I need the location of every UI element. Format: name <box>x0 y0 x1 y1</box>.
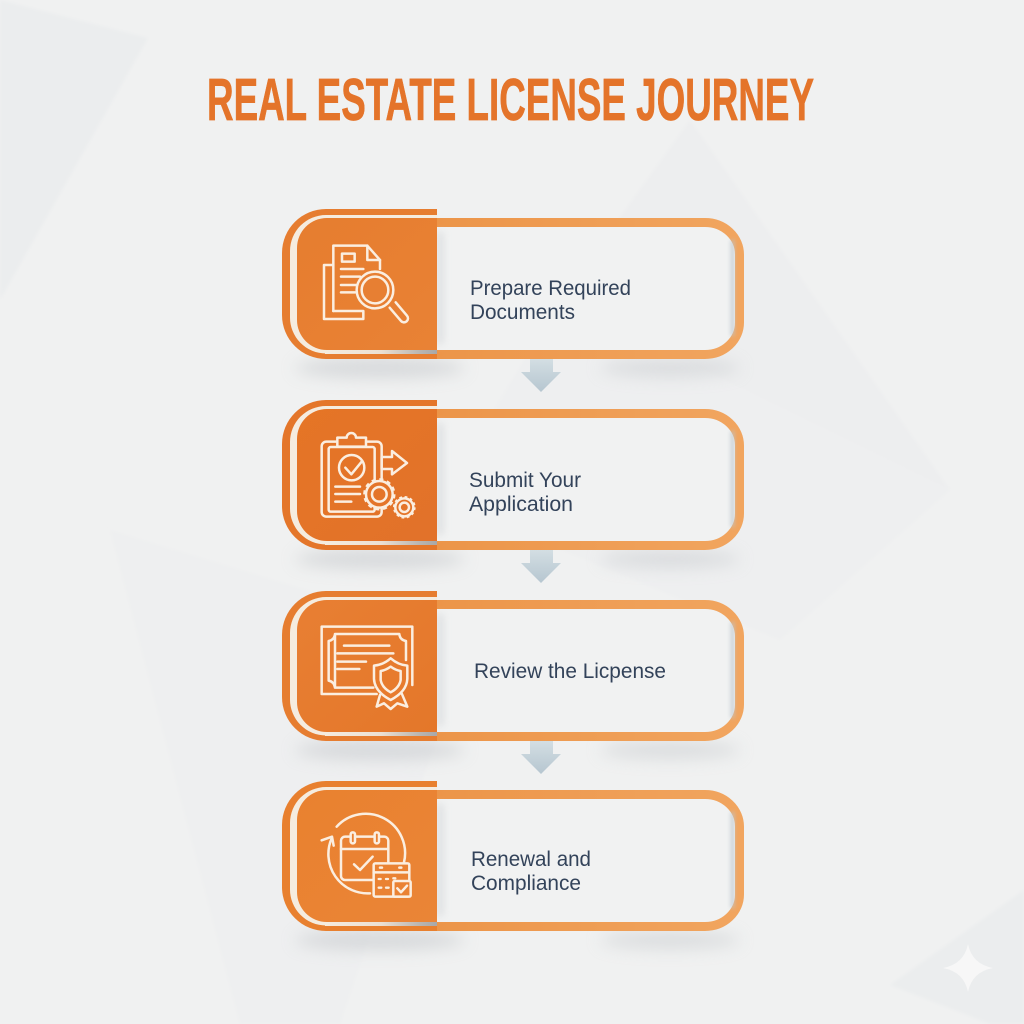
step 2 orange panel <box>297 409 437 541</box>
step 3 orange panel <box>297 600 437 732</box>
step 4 label: Compliance <box>471 872 581 895</box>
step 2 label: Submit Your <box>469 469 581 492</box>
arrow 3 <box>521 741 561 774</box>
step 2 label <box>469 469 581 516</box>
icon: corner sparkle <box>943 944 993 992</box>
icon: clipboard, arrow and gears <box>322 433 414 517</box>
step 1 orange panel <box>297 218 437 350</box>
step 2 label: Application <box>469 493 573 516</box>
step 1 label: Prepare Required <box>470 277 631 300</box>
icon: renewal cycle with calendars <box>322 814 411 897</box>
icon: document with magnifier <box>324 246 408 322</box>
step 1 label <box>470 277 631 324</box>
step 4 label: Renewal and <box>471 848 591 871</box>
step 1 label: Documents <box>470 301 575 324</box>
step 1 card: Prepare Required Documents <box>282 209 740 378</box>
step 2 card: Submit Your Application <box>282 400 740 569</box>
step 4 label <box>471 848 591 895</box>
arrow 1 <box>521 359 561 392</box>
step 4 orange panel <box>297 790 437 922</box>
step 4 card: Renewal and Compliance <box>282 781 740 950</box>
step 3 label: Review the Licpense <box>474 660 666 683</box>
step 3 card: Review the Licpense <box>282 591 740 760</box>
icon: certificate with shield badge <box>322 627 412 709</box>
arrow 2 <box>521 550 561 583</box>
